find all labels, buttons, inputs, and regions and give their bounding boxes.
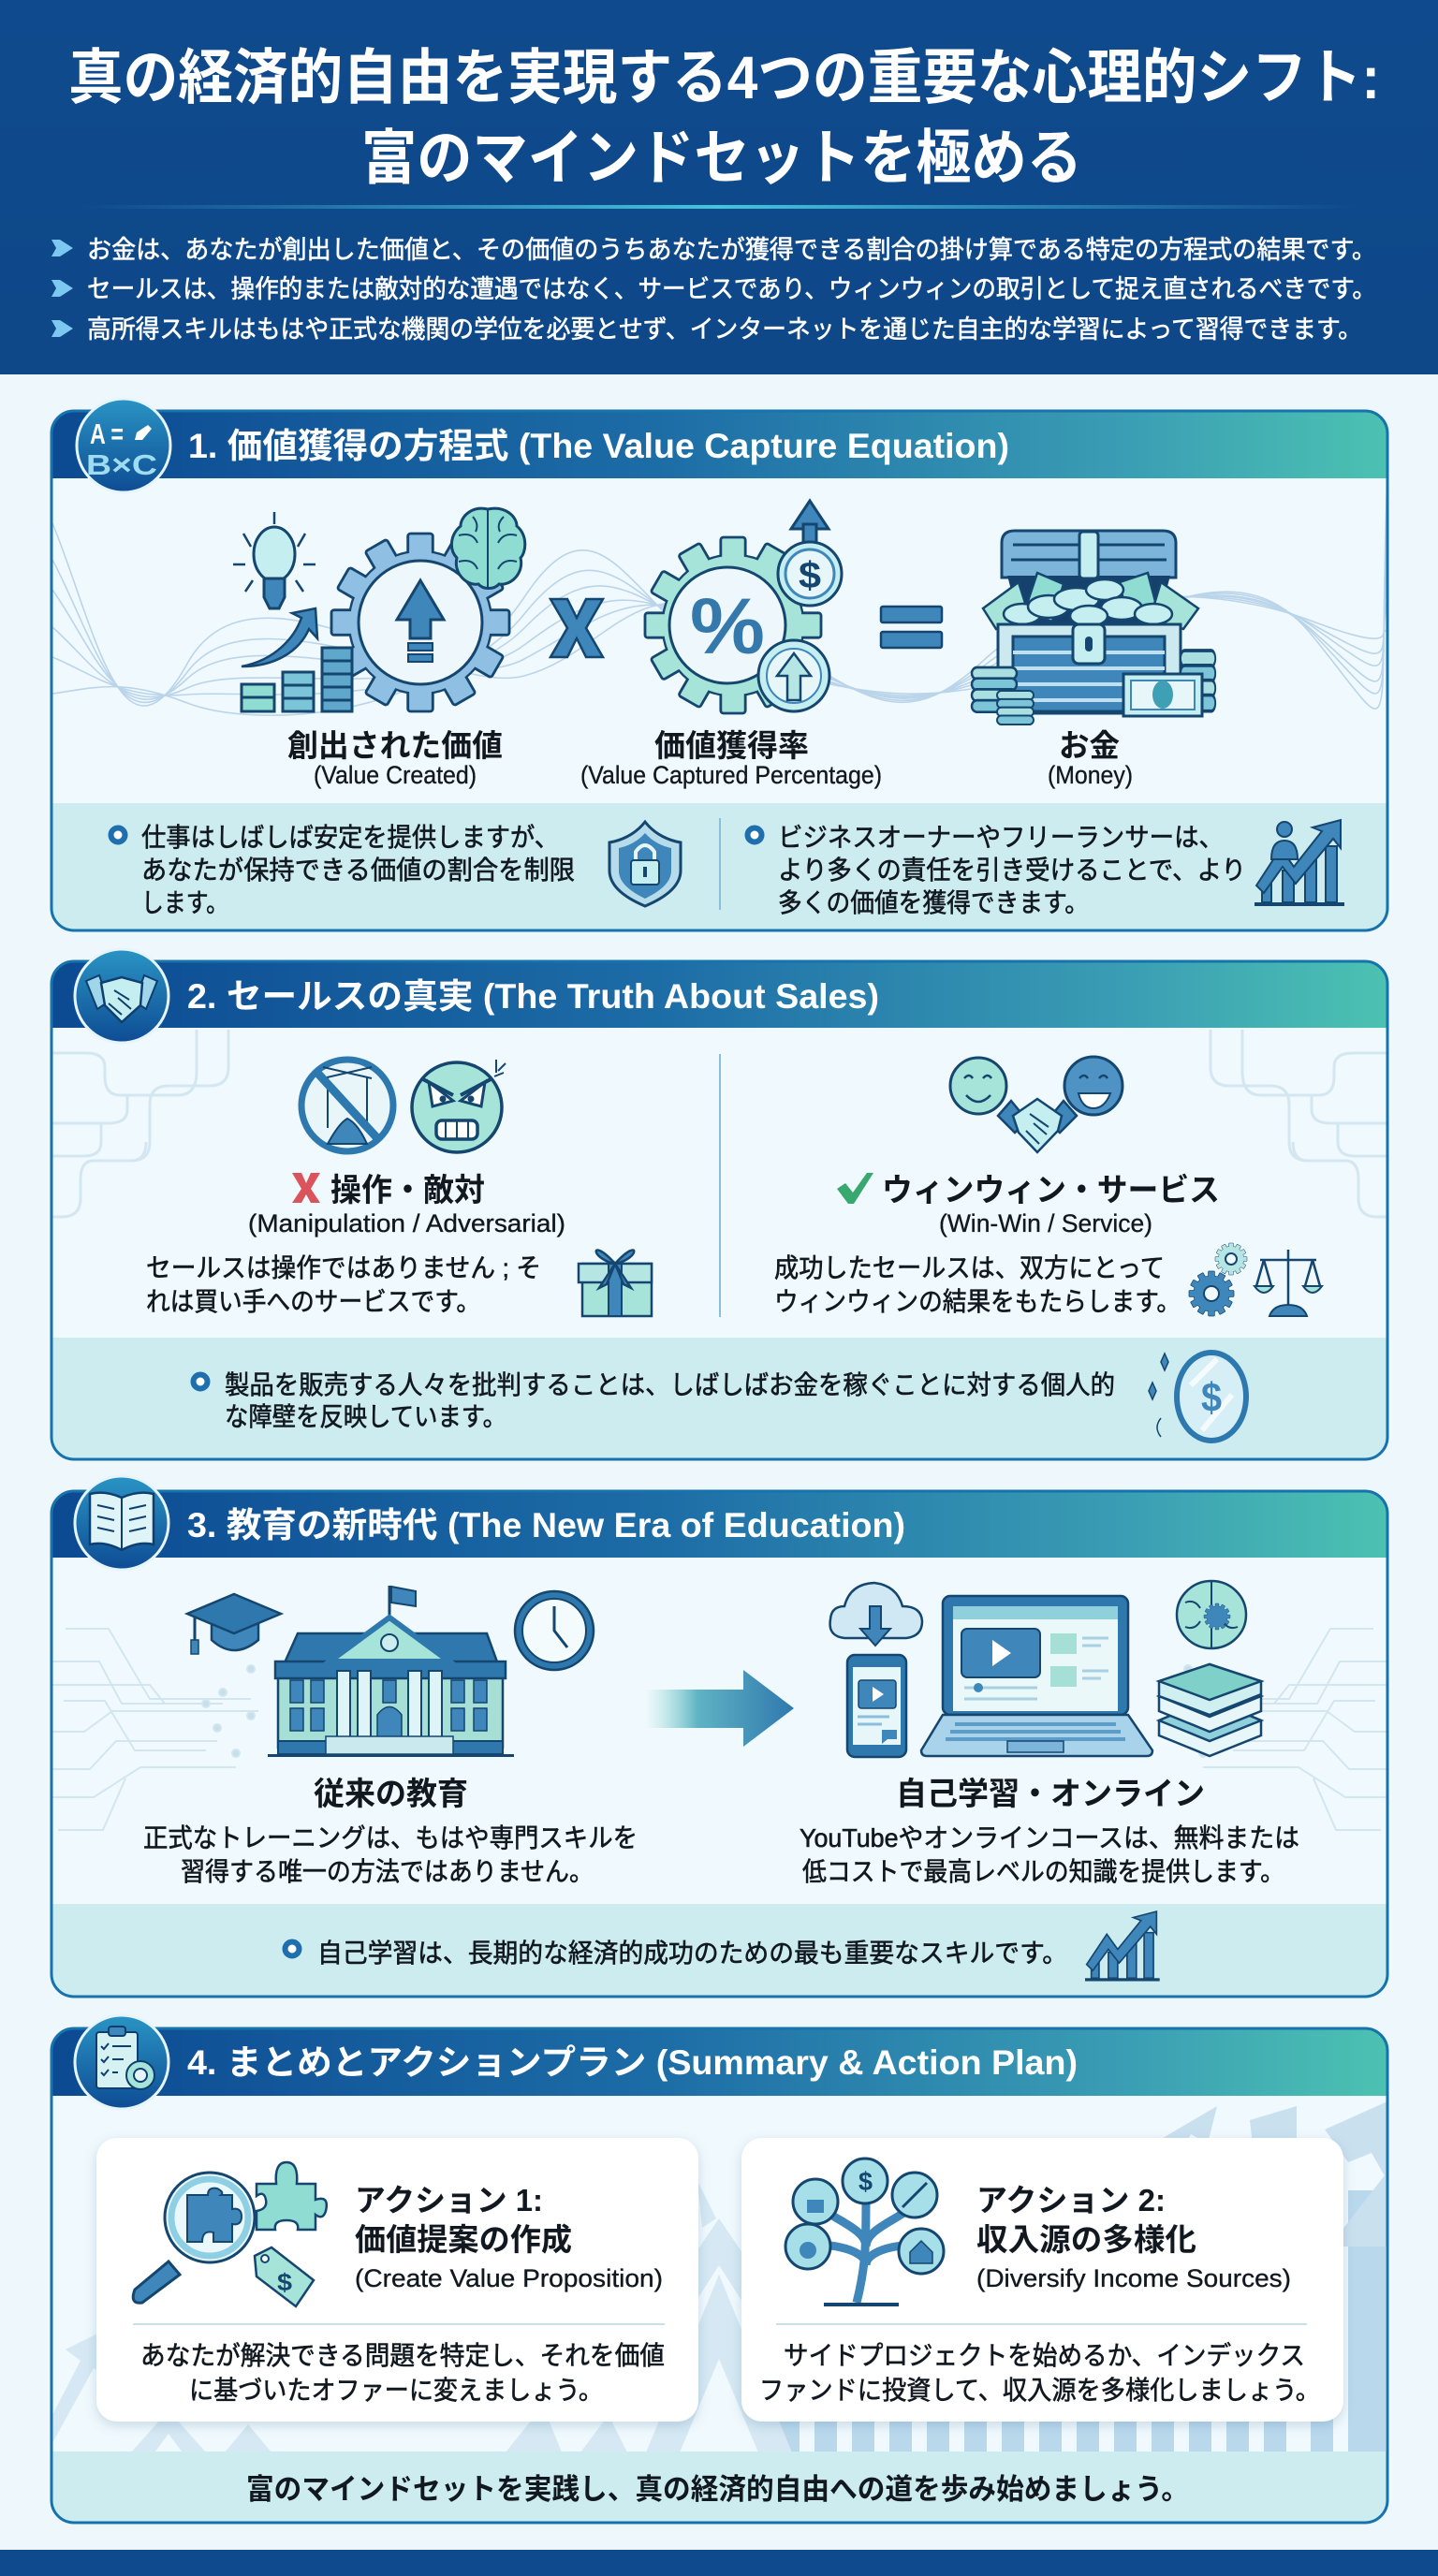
panel 4: summary and action plan: [51, 2015, 1387, 2523]
equation labels: 創出された価値: [287, 728, 503, 763]
circuit decoration right: [1211, 1030, 1387, 1217]
header bar: [51, 1491, 1387, 1558]
action 2 title: (Diversify Income Sources): [976, 2264, 1291, 2292]
circuit decoration left: [52, 1629, 258, 1830]
section heading: 3. 教育の新時代 (The New Era of Education): [187, 1506, 905, 1544]
column: manipulation: [146, 1173, 565, 1316]
title: [68, 44, 1380, 192]
column: self-study online: 自己学習・オンライン: [896, 1777, 1205, 1812]
action 1 title: 価値提案の作成: [355, 2222, 572, 2257]
column: traditional education: [143, 1777, 638, 1886]
equation labels: (Value Captured Percentage): [580, 761, 882, 789]
note: business owners: 多くの価値を獲得できます。: [778, 888, 1089, 917]
note: job stability: 仕事はしばしば安定を提供しますが、: [141, 823, 559, 852]
action 2 title: [976, 2183, 1291, 2292]
badge: handshake: [75, 949, 169, 1043]
column: traditional education: 従来の教育: [314, 1777, 468, 1812]
column: manipulation: れは買い手へのサービスです。: [146, 1287, 480, 1316]
column: manipulation: セールスは操作ではありません ; そ: [146, 1253, 541, 1282]
icon: value captured percentage gear: $: [799, 555, 821, 596]
icon: magnifier and puzzle: $: [277, 2268, 293, 2296]
badge: equation: [77, 399, 170, 492]
note: job stability: します。: [141, 888, 228, 917]
column: traditional education: 正式なトレーニングは、もはや専門スキルを: [143, 1823, 638, 1852]
note: business owners: より多くの責任を引き受けることで、より: [778, 856, 1246, 885]
equation labels: (Money): [1048, 761, 1133, 789]
insight note: 製品を販売する人々を批判することは、しばしばお金を稼ぐことに対する個人的: [225, 1370, 1115, 1399]
note: job stability: [110, 823, 575, 917]
icon: cross mark: [292, 1173, 320, 1203]
icon: cloud download: [830, 1583, 922, 1646]
column: self-study online: 低コストで最高レベルの知識を提供します。: [802, 1857, 1284, 1886]
icon: graduation cap: [187, 1594, 281, 1654]
rising bars and arrows background: [52, 2101, 1387, 2452]
column: win-win: ウィンウィンの結果をもたらします。: [774, 1287, 1181, 1316]
column: win-win: [774, 1173, 1220, 1316]
icon: clock: [515, 1591, 594, 1670]
title: 富のマインドセットを極める: [361, 124, 1082, 192]
icon: growth chart: [1085, 1911, 1160, 1982]
equation labels: [287, 728, 1133, 789]
action 1 title: [355, 2183, 663, 2292]
icon: income tree: $: [858, 2167, 873, 2196]
equation labels: お金: [1059, 728, 1120, 763]
action 2 text: [759, 2341, 1320, 2405]
footer bar: [0, 2550, 1438, 2576]
circuit decoration right: [1181, 1629, 1387, 1830]
card: action 1: [96, 2138, 698, 2422]
action 1 text: [140, 2341, 665, 2405]
intro bullet list: お金は、あなたが創出した価値と、その価値のうちあなたが獲得できる割合の掛け算である特定の方程式の結果です。: [87, 236, 1376, 264]
intro bullet list: 高所得スキルはもはや正式な機関の学位を必要とせず、インターネットを通じた自主的な学習によって習得できます。: [87, 315, 1362, 344]
note: business owners: [747, 823, 1246, 917]
insight note: 自己学習は、長期的な経済的成功のための最も重要なスキルです。: [317, 1939, 1067, 1968]
icon: multiply: [550, 599, 603, 657]
column: win-win: (Win-Win / Service): [939, 1209, 1152, 1237]
insight strip: [51, 1338, 1387, 1459]
insight note: な障壁を反映しています。: [225, 1402, 506, 1431]
column: manipulation: (Manipulation / Adversarial): [248, 1209, 565, 1237]
action 2 title: 収入源の多様化: [976, 2222, 1196, 2257]
section heading: 1. 価値獲得の方程式 (The Value Capture Equation): [188, 427, 1009, 465]
closing strip: [51, 2452, 1387, 2523]
action 2 text: サイドプロジェクトを始めるか、インデックス: [784, 2341, 1305, 2370]
note: business owners: ビジネスオーナーやフリーランサーは、: [778, 823, 1224, 852]
action 1 title: (Create Value Proposition): [355, 2264, 663, 2292]
column: traditional education: 習得する唯一の方法ではありません。: [181, 1857, 594, 1886]
action 1 title: アクション 1:: [355, 2183, 543, 2217]
icon: no manipulation: [301, 1060, 393, 1151]
arrow: traditional to online: [646, 1670, 794, 1747]
section heading: 2. セールスの真実 (The Truth About Sales): [187, 977, 879, 1016]
column: self-study online: [800, 1777, 1299, 1886]
section heading: 4. まとめとアクションプラン (Summary & Action Plan): [187, 2043, 1078, 2082]
equation labels: 価値獲得率: [654, 728, 809, 763]
column: win-win: ウィンウィン・サービス: [882, 1173, 1220, 1208]
insight strip: [51, 1904, 1387, 1997]
icon: shield lock: [609, 822, 681, 906]
icon: university building: [268, 1586, 514, 1757]
action 2 title: アクション 2:: [976, 2183, 1166, 2217]
icon: gift: [579, 1250, 652, 1316]
icon: value created (bulb, gear, brain, bars): [233, 508, 525, 711]
intro bullet list: [51, 236, 1376, 344]
header bar: [51, 2028, 1387, 2096]
column: win-win: 成功したセールスは、双方にとって: [774, 1253, 1165, 1282]
action 2 text: ファンドに投資して、収入源を多様化しましょう。: [759, 2376, 1320, 2405]
wave background: [52, 474, 1387, 715]
icon: check mark: [837, 1173, 873, 1204]
icon: value captured percentage gear: [645, 501, 842, 713]
badge: checklist and target: [75, 2015, 169, 2109]
icon: stack of books: [1159, 1664, 1261, 1756]
icon: equals: [881, 607, 942, 648]
circuit decoration left: [52, 1030, 228, 1217]
header bar: [51, 961, 1387, 1028]
panel 1: value capture equation: [51, 399, 1387, 930]
icon: brain with gear: [1177, 1581, 1246, 1648]
badge: open book: [75, 1476, 169, 1570]
card: action 2: [741, 2138, 1343, 2422]
icon: mirror with dollar: $: [1201, 1375, 1222, 1421]
note: job stability: あなたが保持できる価値の割合を制限: [141, 856, 575, 885]
icon: angry face: [412, 1060, 506, 1152]
equation labels: (Value Created): [314, 761, 477, 789]
icon: win-win faces and handshake: [950, 1057, 1123, 1152]
insight note: [193, 1370, 1115, 1431]
intro bullet list: セールスは、操作的または敵対的な遭遇ではなく、サービスであり、ウィンウィンの取引として捉え直されるべきです。: [87, 275, 1376, 303]
action 1 text: あなたが解決できる問題を特定し、それを価値: [140, 2341, 665, 2370]
header bar: [51, 411, 1387, 478]
closing message: 富のマインドセットを実践し、真の経済的自由への道を歩み始めましょう。: [246, 2473, 1189, 2506]
badge: equation: A =: [90, 417, 124, 450]
badge: equation: B×C: [86, 448, 157, 481]
icon: mirror with dollar: [1149, 1353, 1246, 1441]
icon: person and growth chart: [1255, 820, 1344, 906]
column: self-study online: YouTubeやオンラインコースは、無料または: [800, 1823, 1299, 1852]
panel 3: new era of education: [51, 1476, 1387, 1997]
action 1 text: に基づいたオファーに変えましょう。: [189, 2376, 603, 2405]
icon: value captured percentage gear: %: [690, 582, 765, 670]
panel 2: truth about sales: [51, 949, 1387, 1459]
icon: smartphone: [847, 1655, 906, 1757]
icon: treasure chest: [972, 531, 1215, 724]
header banner: [0, 0, 1438, 374]
icon: income tree: [785, 2159, 944, 2306]
icon: laptop with video: [921, 1596, 1152, 1756]
icon: magnifier and puzzle: [133, 2162, 327, 2306]
icon: gears and scales: [1189, 1243, 1322, 1316]
column: manipulation: 操作・敵対: [330, 1173, 485, 1208]
summary strip: [51, 803, 1387, 930]
